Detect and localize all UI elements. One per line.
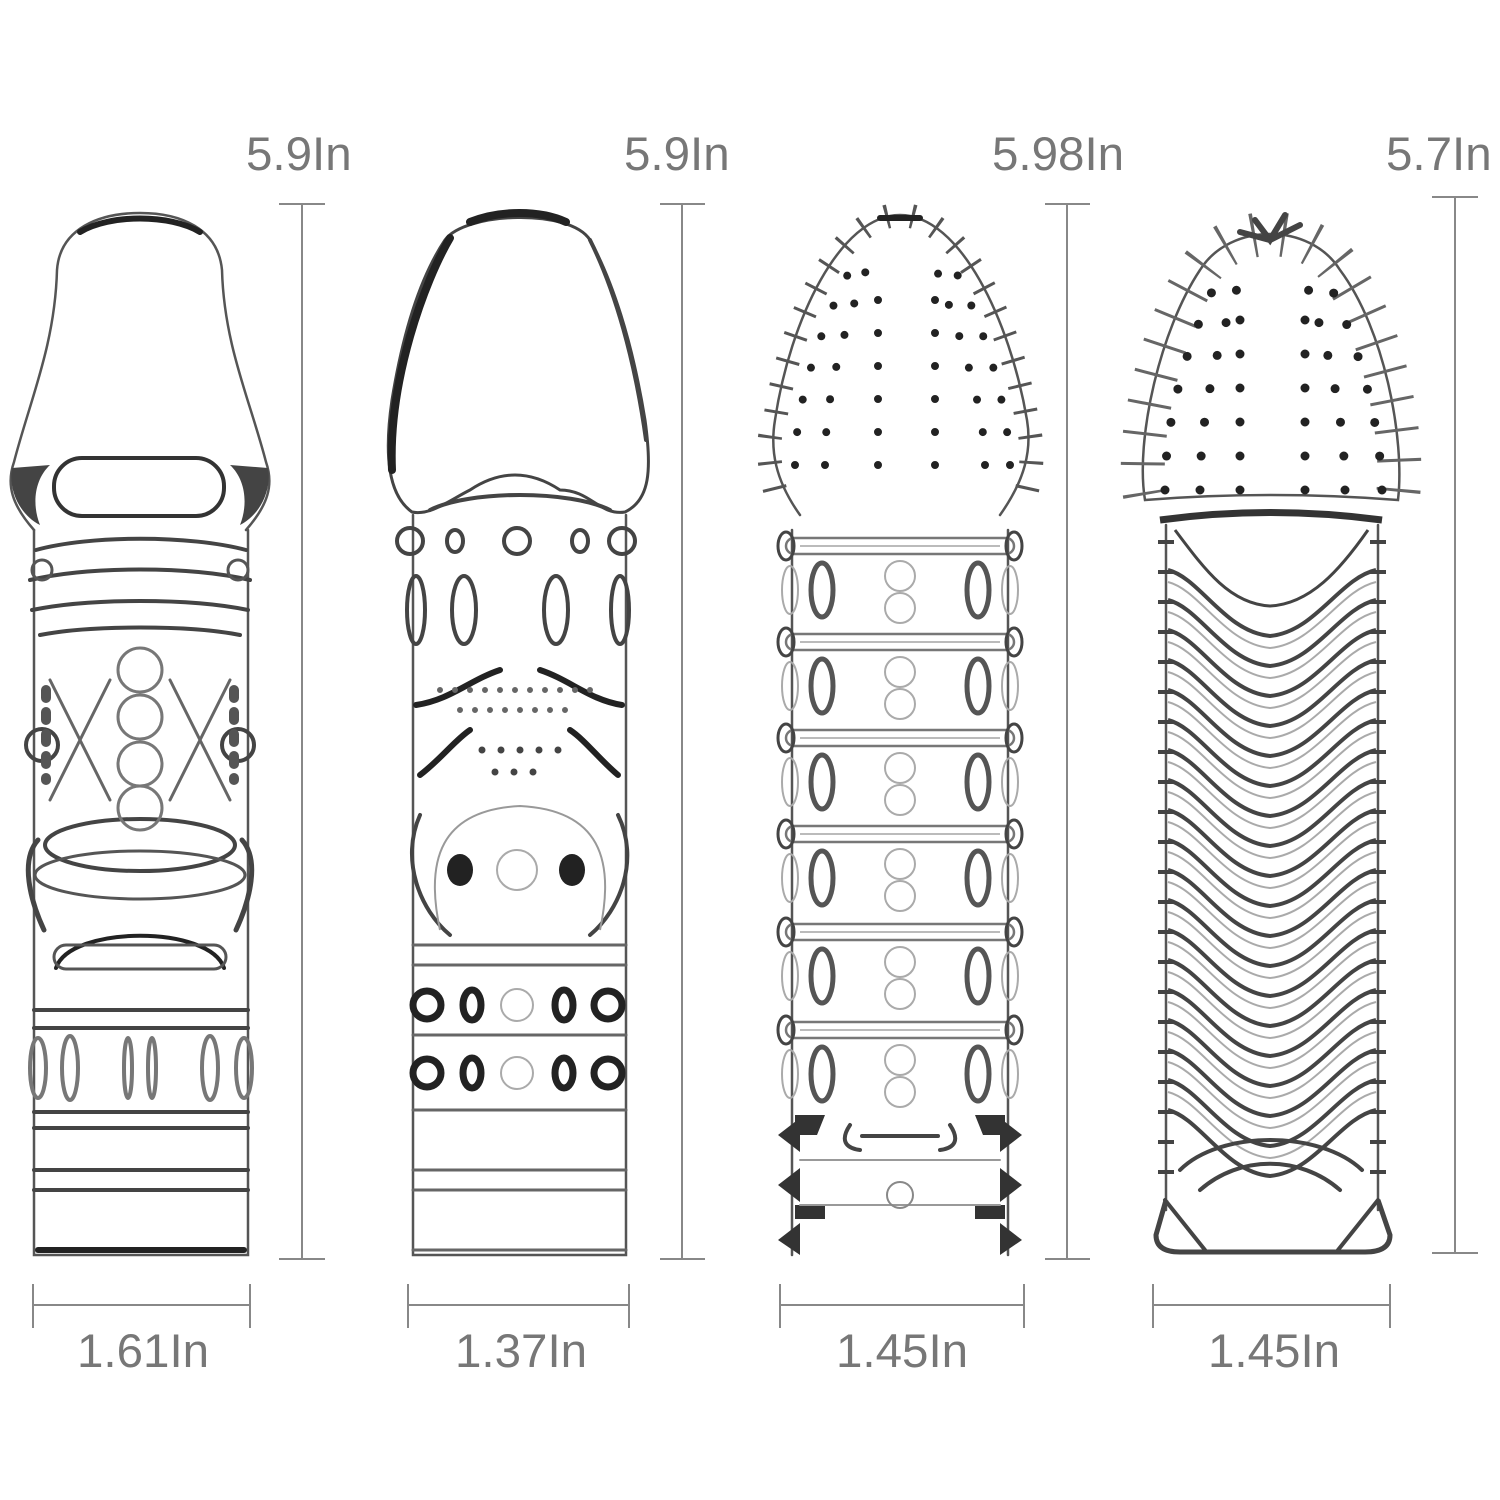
outline spikes <box>1143 234 1399 495</box>
base <box>1156 1140 1390 1252</box>
center circle panel <box>412 806 627 935</box>
width dimension 1: 1.61In <box>77 1325 209 1378</box>
width dimension 4 <box>1153 1284 1390 1378</box>
head dots <box>1165 280 1382 490</box>
width dimension 2: 1.37In <box>455 1325 587 1378</box>
height dimension 2: 5.9In <box>624 128 730 181</box>
shaft outline <box>792 530 1008 1255</box>
height dimension 2 <box>624 128 730 1259</box>
product 4: spiral ridge sleeve <box>1143 215 1399 1252</box>
shaft outline <box>413 515 626 1255</box>
width dimension 4: 1.45In <box>1208 1325 1340 1378</box>
product 2: sleeve with dotted bands <box>388 213 648 1255</box>
crown <box>1240 215 1300 240</box>
height dimension 4: 5.7In <box>1386 128 1492 181</box>
secondary ridge lines <box>1168 582 1376 1158</box>
head outline <box>11 213 269 530</box>
mid chevrons <box>416 670 622 775</box>
width dimension 1 <box>33 1284 250 1378</box>
product 1: ribbed sleeve with smooth head <box>11 213 269 1255</box>
height dimension 1: 5.9In <box>246 128 352 181</box>
repeating ribs and ovals <box>778 532 1022 1107</box>
curved ridges <box>1168 530 1376 1176</box>
height dimension 3 <box>992 128 1124 1259</box>
upper ring row <box>397 528 635 644</box>
shaft ribs <box>413 945 626 1250</box>
width dimension 3: 1.45In <box>836 1325 968 1378</box>
shaft outline <box>34 530 248 1255</box>
height dimension 4 <box>1386 128 1492 1253</box>
lower bead rows <box>413 989 622 1089</box>
lower collar with diamond studs <box>778 1115 1022 1255</box>
side ridge studs <box>1166 540 1378 1190</box>
width dimension 2 <box>408 1284 629 1378</box>
head highlights <box>11 218 269 525</box>
side beads and cross strands <box>26 560 254 930</box>
outline spikes <box>769 215 1032 490</box>
head outline <box>773 215 1029 515</box>
head dark edges <box>392 213 646 510</box>
shaft ribs <box>30 539 250 1250</box>
lower ovals <box>30 1036 252 1100</box>
central beads <box>118 648 162 830</box>
head top <box>880 215 920 221</box>
width dimension 3 <box>780 1284 1024 1378</box>
height dimension 3: 5.98In <box>992 128 1124 181</box>
head outline <box>388 217 648 513</box>
shaft outline <box>1166 525 1378 1210</box>
collar bar <box>1160 512 1382 520</box>
head dots <box>795 260 1010 465</box>
head outline <box>1143 234 1399 500</box>
product 3: spiked tip sleeve <box>769 215 1032 1255</box>
height dimension 1 <box>246 128 352 1259</box>
